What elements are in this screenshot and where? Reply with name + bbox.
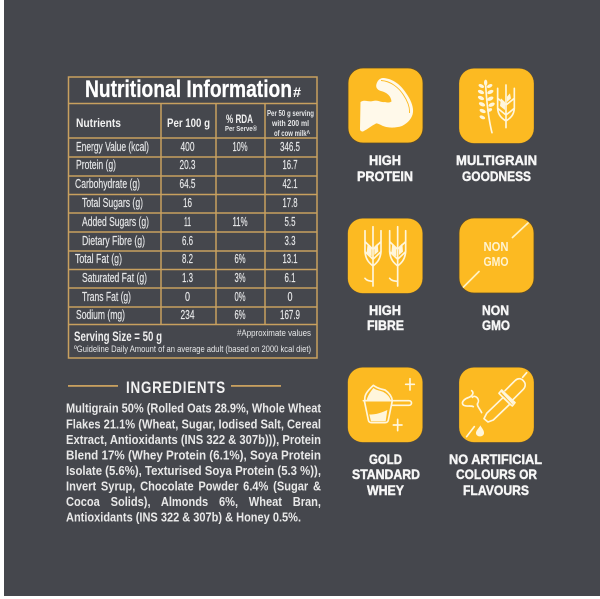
label — [456, 152, 537, 184]
label: HIGH — [369, 152, 401, 168]
ingredients heading: INGREDIENTS — [126, 378, 226, 397]
column: per 100 g values: 16 — [183, 196, 192, 210]
label: STANDARD — [352, 466, 420, 482]
table row labels: Sodium (mg) — [76, 308, 125, 322]
table header row — [76, 109, 314, 138]
panel: nutrition table — [68, 76, 317, 358]
column: per 100 g values: 6.6 — [182, 234, 193, 248]
feature: high fibre — [348, 218, 423, 333]
column: per 100 g values: 20.3 — [180, 158, 196, 172]
table row labels: Protein (g) — [76, 158, 116, 172]
label: FLAVOURS — [463, 482, 529, 498]
column: percent RDA values — [232, 140, 248, 322]
column: per 100 g values: 11 — [184, 215, 191, 229]
ingredients text: Extract, Antioxidants (INS 322 & 307b))), Protein — [66, 432, 321, 447]
column: per 50 g serving values: 3.3 — [284, 234, 296, 248]
table header row: Per Serve® — [225, 125, 258, 133]
icon: wheat stalks — [348, 218, 423, 293]
column: per 50 g serving values: 16.7 — [282, 158, 298, 172]
table header row: Per 100 g — [167, 116, 210, 130]
column: per 50 g serving values: 167.9 — [280, 308, 300, 322]
table row labels: Total Fat (g) — [75, 252, 122, 266]
icon: non GMO badge: GMO — [484, 255, 509, 269]
column: percent RDA values: 11% — [232, 215, 248, 229]
column: percent RDA values: 6% — [234, 252, 246, 266]
icon: non GMO badge: NON — [484, 240, 508, 254]
table row labels: Total Sugars (g) — [82, 196, 143, 210]
ingredients text — [66, 401, 322, 525]
icon: dropper — [459, 367, 534, 442]
table header row: Nutrients — [76, 116, 121, 130]
table row labels: Energy Value (kcal) — [76, 140, 149, 154]
ingredients text: Invert Syrup, Chocolate Powder 6.4% (Sugar & — [66, 478, 321, 494]
column: per 50 g serving values: 0 — [288, 290, 293, 304]
column: per 100 g values: 234 — [180, 308, 195, 322]
label — [482, 302, 510, 333]
column: per 100 g values: 64.5 — [180, 177, 196, 191]
column: percent RDA values: 6% — [234, 308, 246, 322]
ingredients text: Antioxidants (INS 322 & 307b) & Honey 0.5%. — [66, 510, 301, 525]
ingredients text: Cocoa Solids), Almonds 6%, Wheat Bran, — [66, 494, 321, 509]
column: per 50 g serving values: 346.5 — [280, 140, 300, 154]
label: MULTIGRAIN — [456, 152, 537, 168]
column: percent RDA values: 10% — [232, 140, 248, 154]
table footer notes: #Approximate values — [237, 328, 311, 339]
label — [357, 152, 413, 184]
column: per 100 g values: 400 — [180, 140, 195, 154]
column: per 100 g values — [180, 140, 196, 322]
table title: Nutritional Information — [85, 76, 292, 103]
icon: non GMO badge — [459, 218, 534, 293]
label — [367, 302, 404, 333]
label: GOLD — [369, 451, 402, 467]
table row labels: Added Sugars (g) — [82, 215, 149, 229]
feature: gold standard whey — [348, 367, 423, 498]
label: GMO — [482, 317, 510, 333]
table footer notes — [74, 328, 311, 355]
icon: flexed arm — [348, 68, 423, 143]
label: FIBRE — [367, 317, 404, 333]
ingredients text: Isolate (5.6%), Texturised Soya Protein (5.3 %)), — [66, 463, 321, 478]
table row labels: Saturated Fat (g) — [82, 271, 147, 285]
table header row: % RDA — [226, 112, 253, 126]
feature: high protein — [348, 68, 423, 184]
column: per 100 g values: 8.2 — [182, 252, 193, 266]
table header row: Per 50 g serving — [267, 109, 314, 118]
label — [352, 451, 420, 498]
label: NON — [482, 302, 509, 318]
label: GOODNESS — [462, 168, 531, 184]
label — [449, 451, 542, 498]
column: per 50 g serving values: 42.1 — [282, 177, 298, 191]
table row labels: Trans Fat (g) — [82, 290, 131, 304]
table row labels: Carbohydrate (g) — [75, 177, 140, 191]
table footer notes: Serving Size = 50 g — [74, 329, 162, 344]
column: percent RDA values: 0% — [234, 290, 246, 304]
ingredients text: Blend 17% (Whey Protein (6.1%), Soya Protein — [66, 447, 321, 462]
table header row: with 200 ml — [271, 119, 309, 128]
feature: no artificial colours or flavours — [449, 367, 542, 498]
column: per 100 g values: 1.3 — [182, 271, 193, 285]
table row labels — [75, 140, 149, 322]
column: per 50 g serving values: 13.1 — [282, 252, 298, 266]
column: per 50 g serving values: 5.5 — [284, 215, 296, 229]
icon: grains — [459, 68, 534, 143]
column: per 50 g serving values: 6.1 — [284, 271, 296, 285]
table title: # — [293, 84, 301, 100]
label: COLOURS OR — [456, 466, 537, 482]
label: PROTEIN — [357, 168, 413, 184]
label: NO ARTIFICIAL — [449, 451, 542, 467]
column: per 50 g serving values — [280, 140, 300, 322]
icon: whey scoop — [348, 367, 423, 442]
table row labels: Dietary Fibre (g) — [82, 234, 145, 248]
table footer notes: ºGuideline Daily Amount of an average adult (based on 2000 kcal diet) — [74, 344, 311, 355]
ingredients text: Multigrain 50% (Rolled Oats 28.9%, Whole Wheat — [66, 401, 322, 416]
ingredients text: Flakes 21.1% (Wheat, Sugar, Iodised Salt, Cereal — [66, 416, 321, 431]
feature: non GMO — [459, 218, 534, 333]
column: per 100 g values: 0 — [185, 290, 190, 304]
table header row: of cow milk^ — [274, 129, 310, 138]
column: percent RDA values: 3% — [234, 271, 246, 285]
label: HIGH — [369, 302, 401, 318]
feature: multigrain goodness — [456, 68, 537, 184]
column: per 50 g serving values: 17.8 — [282, 196, 298, 210]
label: WHEY — [367, 482, 405, 498]
